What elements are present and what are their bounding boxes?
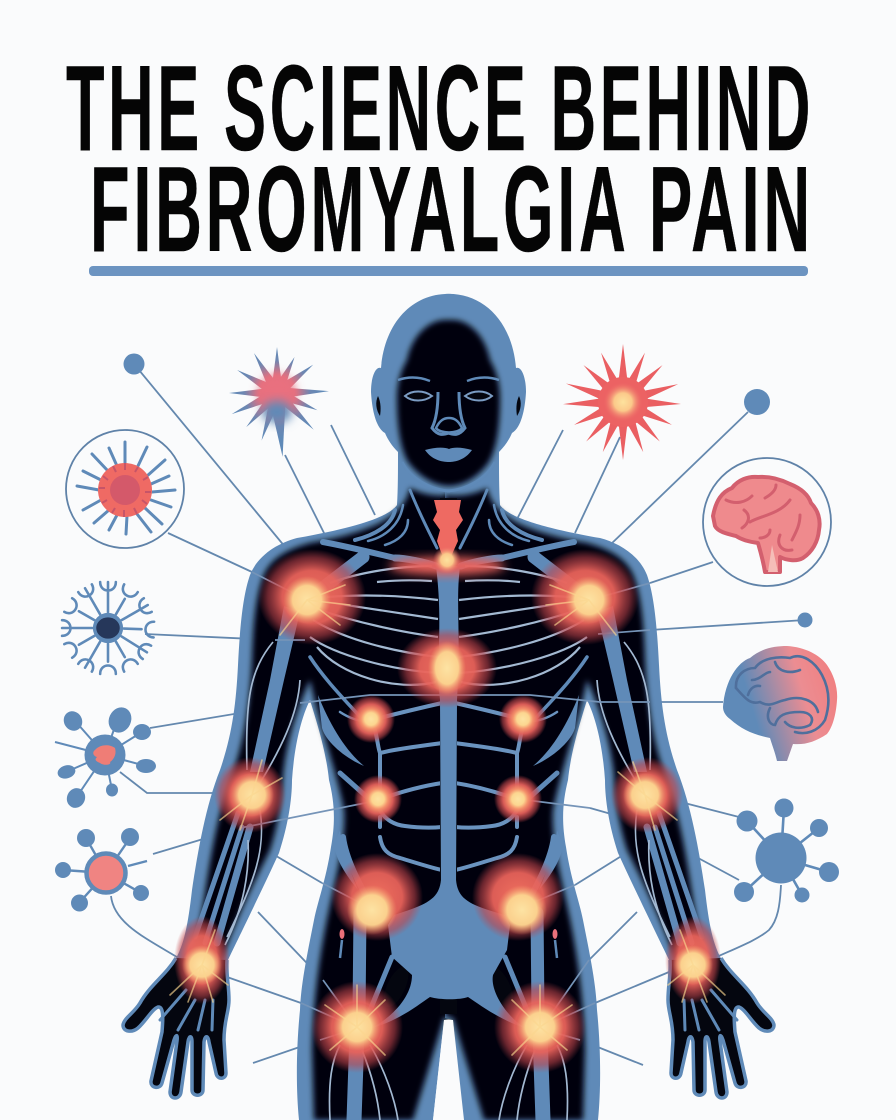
body right half (mirror) <box>445 294 774 1120</box>
icon: branching neuron <box>62 582 154 674</box>
crotch gap <box>433 1020 462 1120</box>
flank wedge <box>318 695 364 766</box>
icon: circled salmon brain <box>703 458 831 586</box>
icon: cell with salmon nucleus <box>55 704 156 811</box>
sternum and abdominal midline <box>372 566 525 1028</box>
connector lines crossing body <box>240 572 650 1040</box>
human body figure <box>123 294 774 1120</box>
hotspot rays <box>170 585 725 1055</box>
icon: blue and red brain <box>723 646 837 761</box>
icon: circled red nerve cell <box>66 430 184 548</box>
face: lips and nose <box>425 418 472 462</box>
upper chest red band <box>389 557 505 575</box>
right face details (mirror) <box>447 377 499 491</box>
icon: blue cell cluster <box>734 798 839 902</box>
title <box>66 40 814 277</box>
muscle strands <box>160 542 395 1120</box>
ear hollow <box>376 396 381 416</box>
icon: blue and red starburst <box>229 347 329 458</box>
upper arm strand <box>250 606 300 772</box>
icon: red starburst <box>563 344 681 460</box>
node: right dot <box>798 612 812 628</box>
body left half: silhouette, dark interior, muscles <box>123 294 452 1120</box>
connector lines behind body <box>111 364 805 1065</box>
icon: cell with salmon core <box>55 828 149 912</box>
abdominal lines <box>340 703 442 870</box>
node: top left dot <box>124 354 144 374</box>
pain hotspots <box>174 546 721 1073</box>
centre seam cover <box>440 498 457 1014</box>
node: top right dot <box>744 389 770 415</box>
left face details <box>398 377 450 491</box>
title underline <box>89 266 808 276</box>
head dark face <box>397 320 500 486</box>
left hand <box>123 958 229 1098</box>
rib lines <box>310 566 438 685</box>
throat highlight <box>433 500 463 560</box>
